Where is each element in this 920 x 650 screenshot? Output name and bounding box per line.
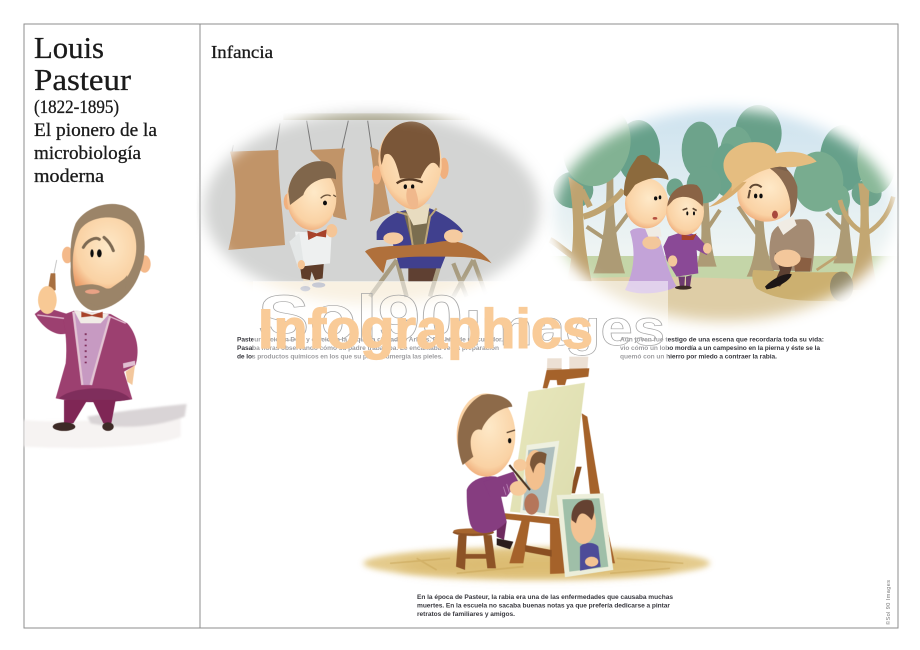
coat: [56, 311, 138, 402]
title: name: Louis: [34, 30, 104, 65]
text: painter caption: retratos de familiares y amigos.: [417, 611, 515, 618]
text: wolf bite caption: vio cómo un lobo mordía a un campesino en la pierna y éste se la: [620, 345, 820, 352]
illustration: wolf bite scene: [549, 102, 898, 330]
wooden floor: [363, 547, 710, 579]
easel: [498, 357, 615, 574]
text: painter caption: En la época de Pasteur, la rabia era una de las enfermedades que causaba muchas: [417, 594, 673, 601]
text: tannery caption: de los productos químicos en los que su padre sumergía las pieles.: [237, 354, 443, 360]
young Pasteur: [663, 184, 712, 290]
text: painter caption: [417, 594, 673, 618]
scalpel: [53, 260, 57, 277]
watermark: outlined text: Images: [465, 300, 665, 356]
subtitle: dates and description: El pionero de la: [34, 120, 158, 141]
illustration: tannery scene: [198, 106, 546, 308]
stool: [453, 528, 496, 570]
section heading: Infancia: [211, 42, 273, 62]
wall and floor: [198, 106, 546, 282]
illustration: young painter at easel: [363, 357, 710, 579]
bow tie: [81, 312, 103, 318]
subtitle: dates and description: microbiología: [34, 143, 142, 164]
woman: [624, 155, 677, 293]
title: name: [34, 30, 132, 97]
watermark: outlined text: [258, 282, 665, 356]
text: tannery caption: [237, 336, 503, 360]
hanging hides: [232, 121, 372, 153]
watermark: outlined text: Sol90: [258, 282, 463, 354]
background trees: [553, 105, 882, 277]
title: name: Pasteur: [34, 62, 132, 97]
legs and shoes: [64, 400, 116, 423]
boy: [284, 161, 337, 291]
tanner: [365, 122, 492, 297]
sky, grass and path: [551, 102, 898, 256]
watermark: translucent band: [253, 281, 668, 368]
illustration: Pasteur portrait: [24, 204, 187, 448]
subtitle: dates and description: (1822-1895): [34, 97, 119, 118]
child painter: [457, 393, 530, 549]
text: wolf bite caption: [620, 336, 824, 360]
watermark: [253, 281, 668, 368]
head: [62, 247, 73, 263]
finished portrait: [557, 493, 613, 577]
foreground trees: [550, 96, 896, 290]
subtitle: dates and description: [34, 97, 158, 187]
credit: ©Sol 90 Images: [885, 580, 892, 625]
canvas: [510, 383, 585, 517]
text: painter caption: muertes. En la escuela no sacaba buenas notas ya que prefería dedicarse a pintar: [417, 602, 670, 610]
title block: [34, 30, 158, 187]
sleeve and hand: [35, 307, 71, 334]
text: wolf bite caption: quemó con un hierro por miedo a contraer la rabia.: [620, 354, 777, 360]
sketch on canvas: [520, 441, 559, 516]
text: wolf bite caption: Aún joven fue testigo de una escena que recordaría toda su vida:: [620, 336, 824, 344]
subtitle: dates and description: moderna: [34, 166, 105, 187]
text: tannery caption: Pasaba horas observando cómo su padre trabajaba. Le encantaba ver la preparación: [237, 345, 499, 352]
sidebar divider: [199, 24, 201, 628]
watermark: orange text: Infographics: [258, 297, 593, 360]
text: tannery caption: Pasteur nació en Dole y creció en la pequeña ciudad de Arbois. Era hijo de un curtidor.: [237, 336, 503, 344]
peasant on log: [708, 142, 853, 302]
